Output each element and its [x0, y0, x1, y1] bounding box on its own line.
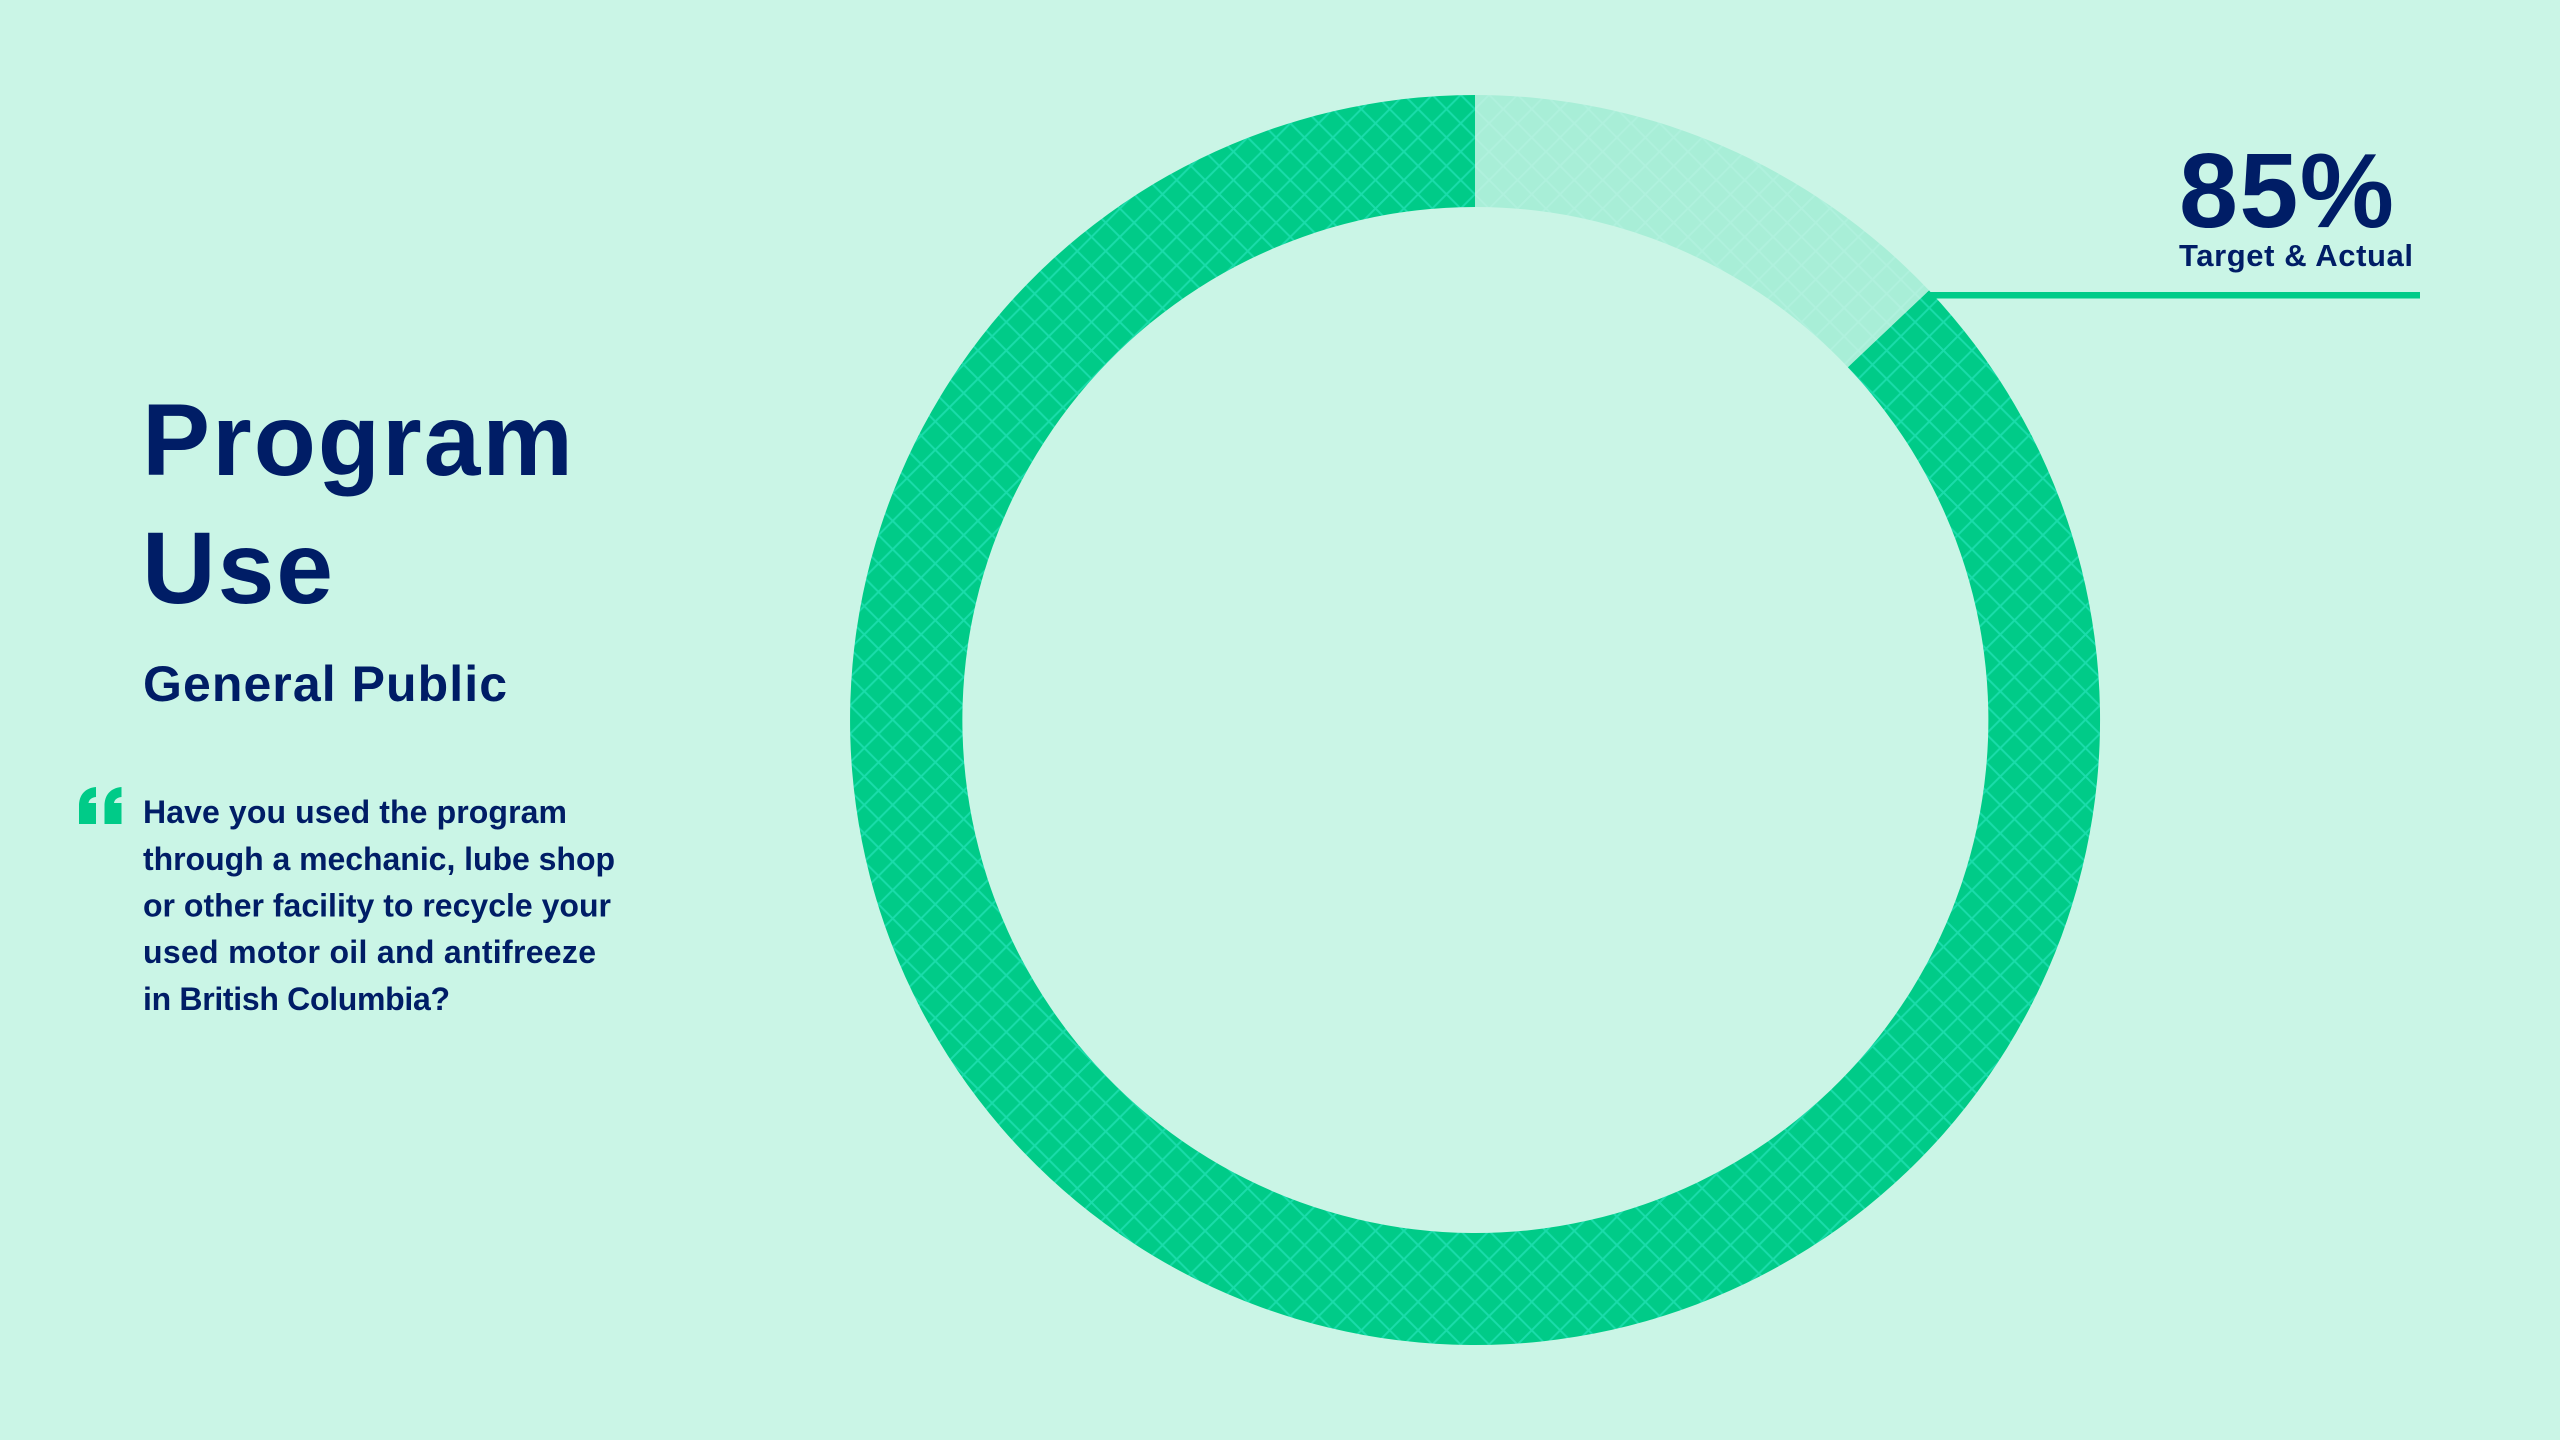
subtitle: General Public	[143, 656, 507, 712]
survey question text: or other facility to recycle your	[143, 888, 611, 924]
callout value: 85%: 85%	[2179, 132, 2394, 250]
survey question text: in British Columbia?	[143, 981, 450, 1017]
icon: quotation mark	[79, 787, 122, 824]
title	[142, 383, 573, 625]
survey question text: Have you used the program	[143, 794, 567, 830]
survey question text: through a mechanic, lube shop	[143, 841, 615, 877]
callout leader line	[1927, 292, 2420, 298]
donut chart: 85% target and actual	[850, 95, 2100, 1345]
title: Use	[142, 511, 333, 625]
callout label: Target & Actual: Target & Actual	[2179, 238, 2413, 273]
title: Program	[142, 383, 573, 497]
donut segment: 85% share	[850, 95, 2100, 1345]
survey question text	[143, 794, 615, 1017]
survey question text: used motor oil and antifreeze	[143, 934, 596, 970]
donut segment: remaining share	[1475, 95, 1929, 367]
